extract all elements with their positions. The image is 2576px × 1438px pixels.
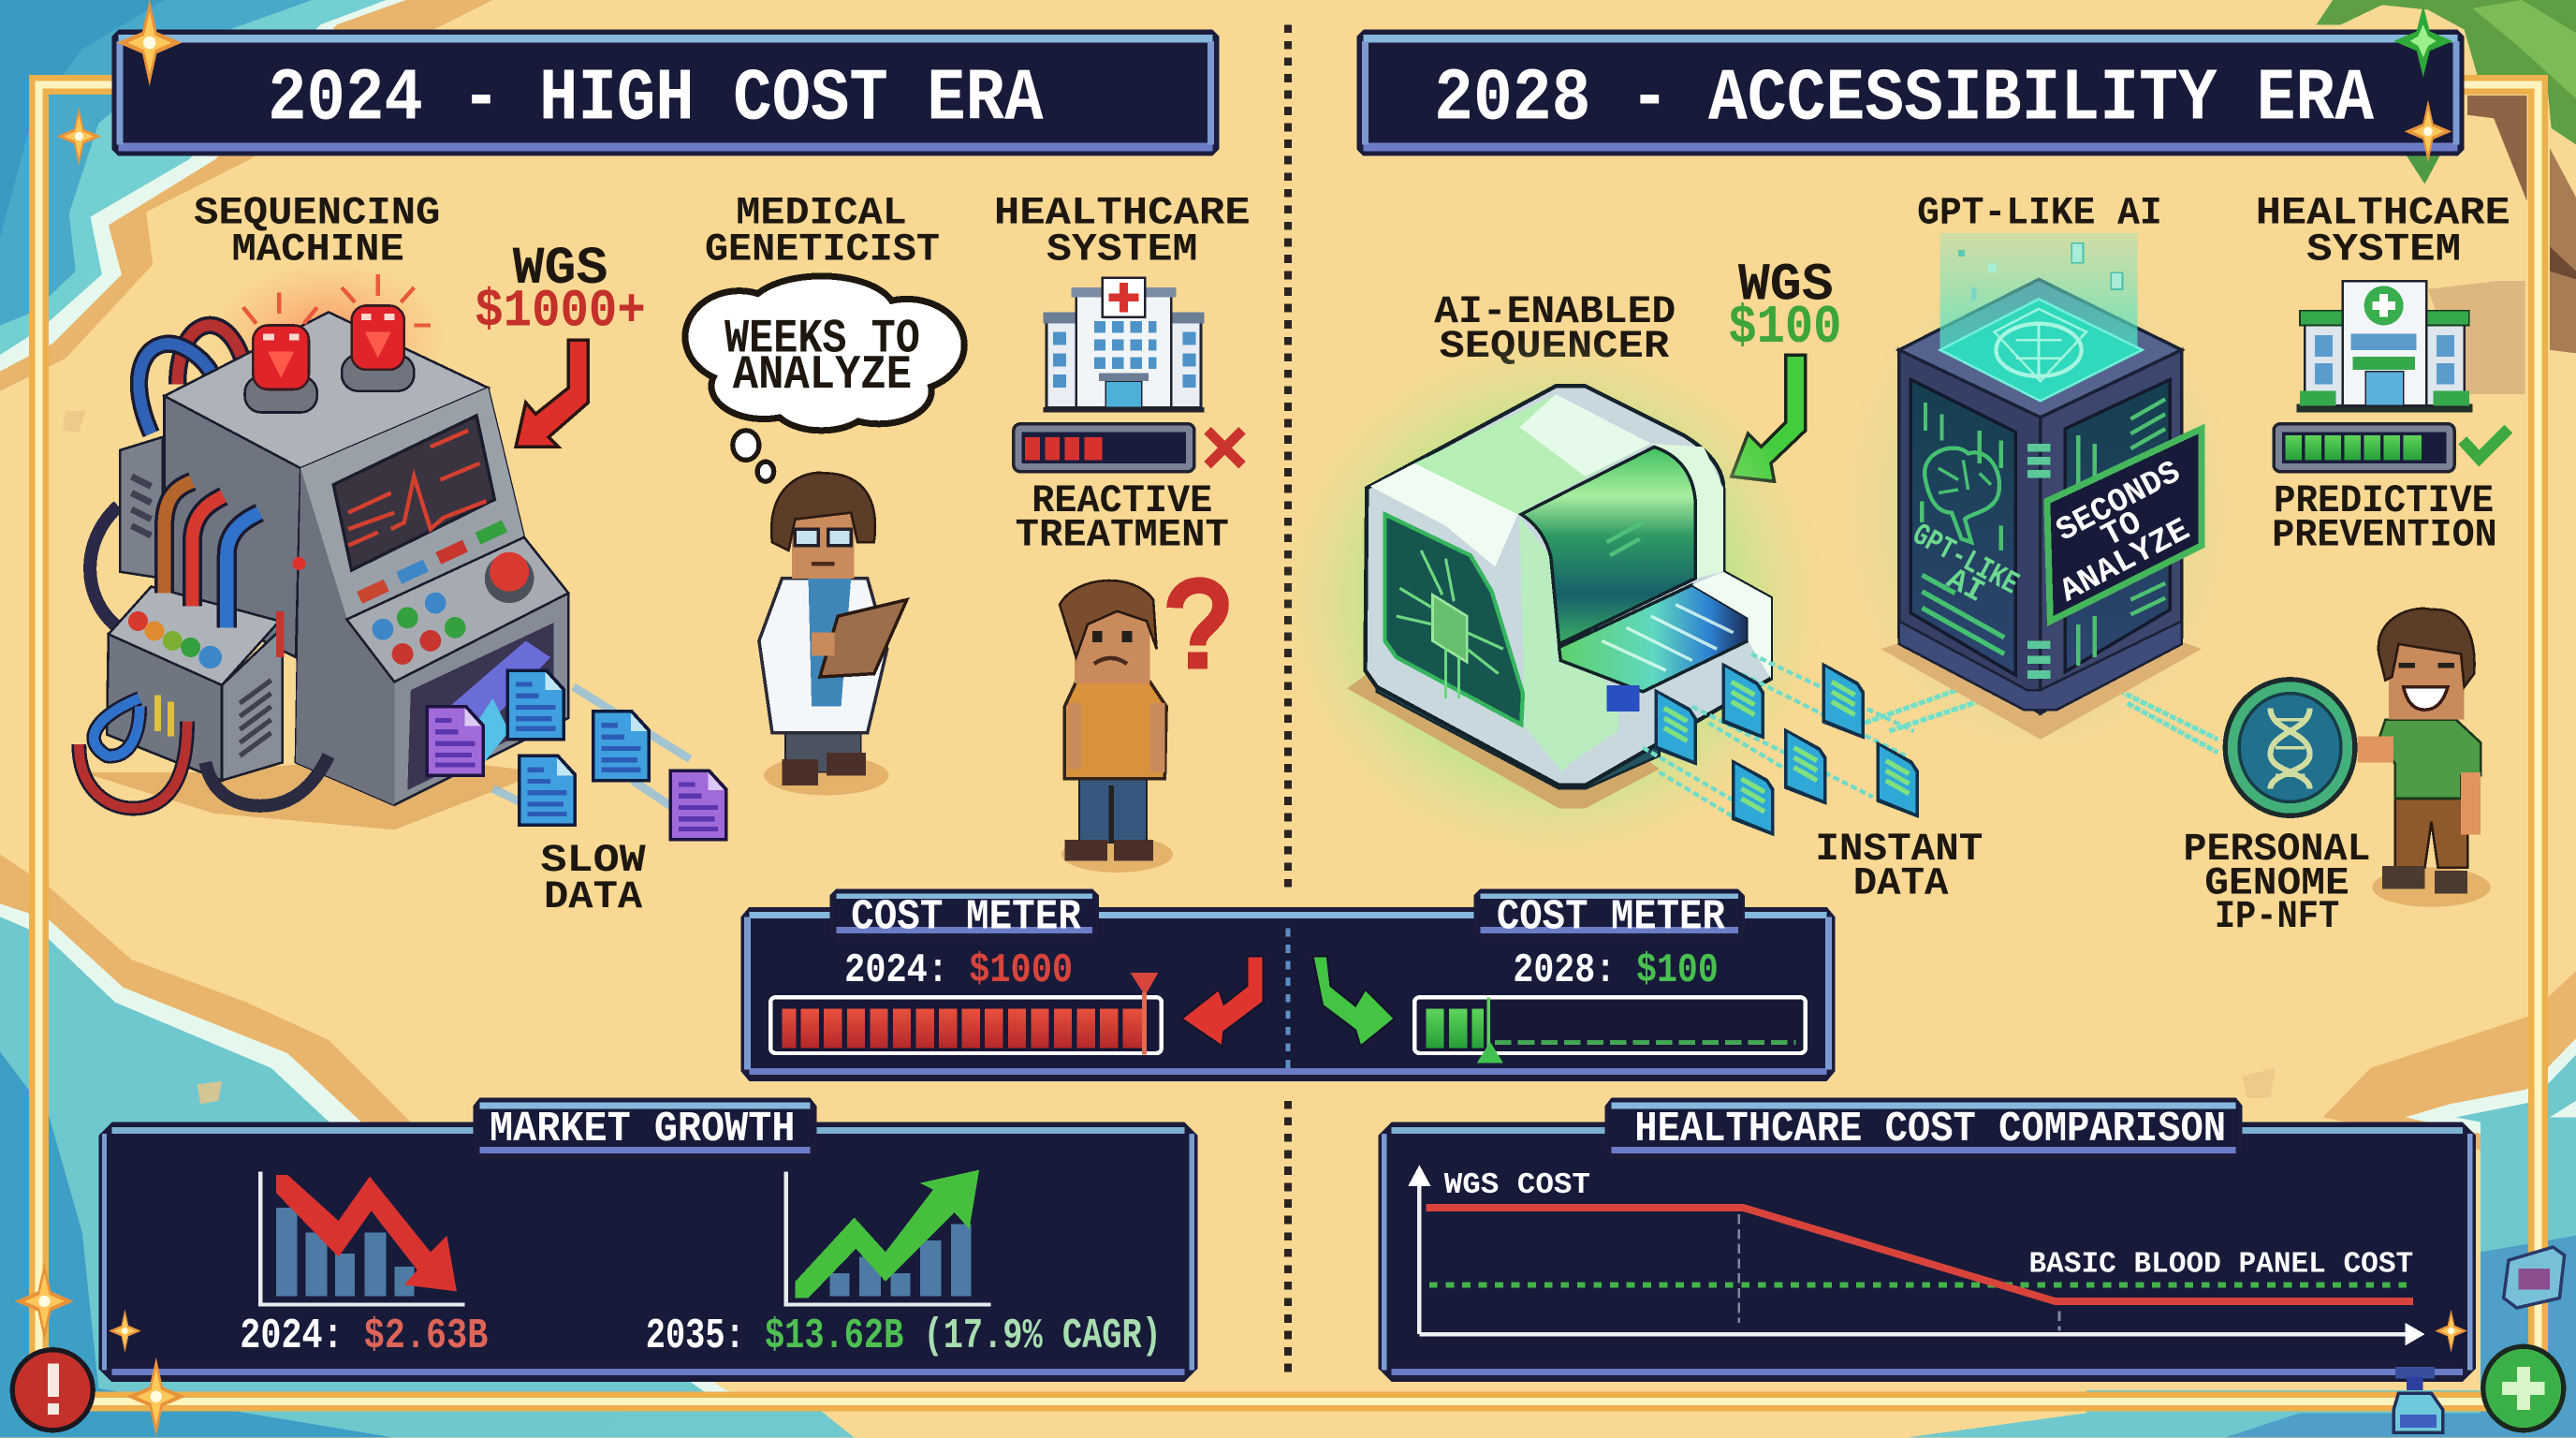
sign: seconds to analyze: [2047, 429, 2202, 621]
meter: 2028 low green: [1414, 997, 1806, 1064]
label: personal genome IP-NFT: PERSONAL: [2183, 827, 2371, 872]
value: 2028 $100: 2028: $100: [1513, 947, 1719, 994]
arrow: green down to sequencer: [1732, 355, 1806, 481]
character: medical geneticist: [759, 473, 907, 795]
meter: 2024 full red: [770, 973, 1162, 1055]
divider: lower: [1286, 1101, 1290, 1377]
label: healthcare system 2028: [2256, 191, 2510, 271]
label: reactive treatment: REACTIVE: [1032, 478, 1212, 523]
label: slow data: [540, 838, 647, 919]
tab: healthcare cost comparison: HEALTHCARE COST COMPARISON: [1634, 1105, 2226, 1153]
label: slow data: SLOW: [540, 838, 647, 883]
label: personal genome IP-NFT: GENOME: [2204, 861, 2349, 906]
label: AI-enabled sequencer: SEQUENCER: [1439, 324, 1670, 369]
sign: seconds to analyze: ANALYZE: [2054, 511, 2196, 610]
chart: 2024 market declining: [260, 1171, 465, 1304]
thought cloud: weeks to analyze: [685, 276, 964, 481]
label: sequencing machine: MACHINE: [232, 227, 404, 271]
value: 2024 $2.63B: 2024: $2.63B: [240, 1312, 488, 1360]
label: instant data: [1815, 827, 1983, 906]
chart: 2035 market growing: [786, 1170, 990, 1304]
label: healthcare system 2024: SYSTEM: [1046, 227, 1197, 271]
label: medical geneticist: MEDICAL: [736, 191, 907, 236]
label: AI-enabled sequencer: AI-ENABLED: [1434, 289, 1676, 334]
panel: healthcare cost comparison: [1379, 1097, 2476, 1382]
price tag: WGS $1000+: [475, 239, 646, 341]
cloud text: ANALYZE: [733, 349, 912, 403]
icon: green check: [2463, 429, 2509, 459]
label: medical geneticist: GENETICIST: [705, 227, 940, 271]
arrow: green down to right: [1312, 956, 1395, 1047]
axis label: WGS cost: WGS COST: [1444, 1169, 1590, 1202]
icon: hospital green cross: [2297, 281, 2472, 413]
panel: market growth: [98, 1097, 1197, 1382]
header title: 2024 - HIGH COST ERA: [268, 56, 1044, 140]
arrow: red down to left: [1181, 956, 1264, 1047]
label: reactive treatment: [1016, 478, 1229, 558]
cloud text: WEEKS TO: [724, 314, 920, 367]
icon: red alert button: [10, 1347, 95, 1432]
label: healthcare system 2028: SYSTEM: [2306, 227, 2461, 271]
header title: 2028 - ACCESSIBILITY ERA: [1434, 56, 2375, 140]
label: healthcare system 2024: HEALTHCARE: [994, 191, 1251, 236]
icon: potion bottle: [2393, 1367, 2443, 1432]
sign: seconds to analyze: TO: [2096, 504, 2148, 555]
icon: question mark: [1175, 585, 1221, 668]
icon: hospital red cross: [1044, 278, 1204, 413]
price tag: WGS $100: WGS: [1738, 255, 1834, 315]
icon: potion jar: [2504, 1247, 2565, 1308]
arrow: red down to machine: [516, 340, 588, 447]
screen text: GPT-like AI: AI: [1940, 562, 1990, 611]
icon: green plus button: [2481, 1344, 2566, 1432]
sequencing machine illustration: [79, 263, 568, 829]
line chart: WGS cost vs blood panel: [1408, 1165, 2424, 1345]
coin: personal genome IP-NFT: [2223, 677, 2358, 818]
data sheets: instant data: [1654, 662, 1919, 836]
label: reactive treatment: TREATMENT: [1016, 513, 1229, 558]
value: 2024 $1000: 2024: $1000: [844, 947, 1073, 994]
label: predictive prevention: PREVENTION: [2272, 513, 2497, 558]
cost meter panel: [741, 888, 1835, 1081]
label: GPT-like AI: GPT-LIKE AI: [1917, 191, 2162, 236]
label: predictive prevention: PREDICTIVE: [2274, 478, 2494, 523]
sign: seconds to analyze: SECONDS: [2050, 454, 2187, 550]
AI-enabled sequencer illustration: [1281, 337, 2217, 862]
label: sequencing machine: SEQUENCING: [194, 191, 440, 236]
tab: cost meter 2028: COST METER: [1497, 893, 1725, 942]
label: personal genome IP-NFT: [2183, 827, 2371, 939]
character: confused patient: [1060, 580, 1173, 873]
data documents: 2024: [426, 668, 728, 842]
header: 2028 accessibility era: [1357, 30, 2465, 156]
label: slow data: DATA: [544, 874, 643, 919]
label: personal genome IP-NFT: IP-NFT: [2215, 894, 2339, 939]
centre divider: upper: [1286, 24, 1290, 895]
tab: cost meter 2024: COST METER: [851, 893, 1081, 942]
label: instant data: INSTANT: [1815, 827, 1983, 872]
label: healthcare system 2028: HEALTHCARE: [2256, 191, 2510, 236]
price tag: WGS $1000+: $1000+: [475, 281, 646, 341]
health meter: predictive (high): [2274, 424, 2454, 472]
label: medical geneticist: [705, 191, 940, 271]
label: instant data: DATA: [1853, 861, 1949, 906]
price tag: WGS $100: $100: [1728, 298, 1841, 359]
character: happy person: [2358, 609, 2491, 907]
GPT-like AI server tower: [1840, 233, 2234, 756]
icon: red x: [1208, 431, 1242, 465]
price tag: WGS $100: [1728, 255, 1841, 359]
label: predictive prevention: [2272, 478, 2497, 558]
screen text: GPT-like AI: GPT-LIKE: [1906, 518, 2024, 603]
cloud text: [724, 314, 920, 403]
value: 2035 $13.62B 17.9% CAGR: 2035: $13.62B (17.9% CAGR): [646, 1312, 1162, 1360]
label: AI-enabled sequencer: [1434, 289, 1676, 369]
label: sequencing machine: [194, 191, 440, 271]
tab: market growth: MARKET GROWTH: [490, 1105, 795, 1153]
label: healthcare system 2024: [994, 191, 1251, 271]
header: 2024 high cost era: [111, 30, 1219, 156]
health meter: reactive (low): [1014, 424, 1194, 472]
series label: basic blood panel cost: BASIC BLOOD PANEL COST: [2029, 1248, 2413, 1281]
price tag: WGS $1000+: WGS: [513, 239, 607, 299]
